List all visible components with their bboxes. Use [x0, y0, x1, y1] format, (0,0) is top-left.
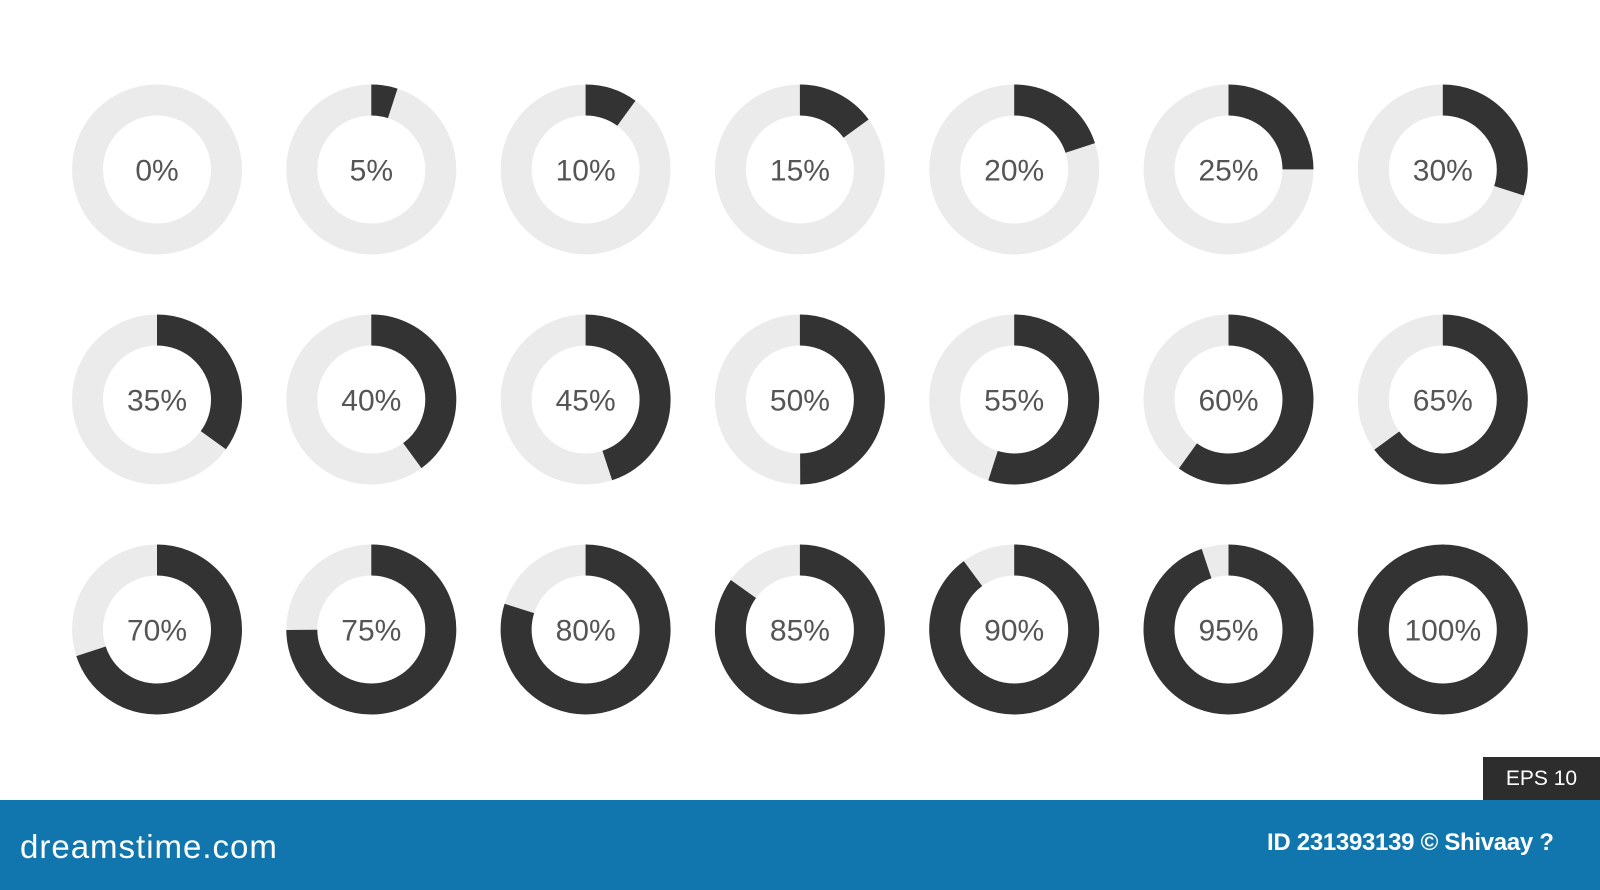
ring 75%: 75%: [341, 614, 401, 648]
ring 15%: 15%: [770, 154, 830, 188]
ring 35%: 35%: [127, 384, 187, 418]
ring 65%: 65%: [1413, 384, 1473, 418]
ring 55%: 55%: [984, 384, 1044, 418]
ring 85%: [730, 560, 869, 699]
EPS 10 tag: [1483, 757, 1600, 800]
ring 70%: 70%: [127, 614, 187, 648]
ring 0%: [88, 100, 226, 239]
ring 40%: 40%: [341, 384, 401, 418]
ring 95%: 95%: [1198, 614, 1259, 648]
ring 95%: [1159, 560, 1298, 699]
ring 35%: [88, 330, 226, 469]
ring 25%: 25%: [1198, 154, 1259, 188]
ring 55%: [945, 330, 1084, 469]
ring 80%: [516, 560, 655, 699]
ring 30%: 30%: [1413, 154, 1473, 188]
ring 20%: [945, 100, 1084, 239]
image id credit: ID 231393139 © Shivaay ?: [1267, 829, 1554, 856]
ring 25%: [1159, 100, 1298, 239]
ring 50%: [730, 330, 869, 469]
ring 60%: 60%: [1198, 384, 1259, 418]
ring 10%: [516, 100, 655, 239]
footer bar: [0, 800, 1600, 890]
ring 100%: 100%: [1404, 614, 1481, 648]
ring 20%: 20%: [984, 154, 1044, 188]
EPS 10 tag: EPS 10: [1506, 767, 1577, 790]
ring 100%: [1373, 560, 1512, 699]
ring 85%: 85%: [770, 614, 830, 648]
ring 5%: 5%: [350, 154, 393, 188]
ring 5%: [302, 100, 441, 239]
ring 90%: [945, 560, 1084, 699]
ring 15%: [730, 100, 869, 239]
ring 45%: [516, 330, 655, 469]
ring 90%: 90%: [984, 614, 1044, 648]
ring 45%: 45%: [556, 384, 616, 418]
ring 65%: [1373, 330, 1512, 469]
ring 50%: 50%: [770, 384, 830, 418]
ring 70%: [88, 560, 226, 699]
ring 0%: 0%: [135, 154, 179, 188]
ring 40%: [302, 330, 441, 469]
ring 60%: [1159, 330, 1298, 469]
logo text: dreamstime.com: [20, 828, 278, 865]
ring 10%: 10%: [556, 154, 616, 188]
ring 30%: [1373, 100, 1512, 239]
ring 80%: 80%: [556, 614, 616, 648]
ring 75%: [302, 560, 441, 699]
